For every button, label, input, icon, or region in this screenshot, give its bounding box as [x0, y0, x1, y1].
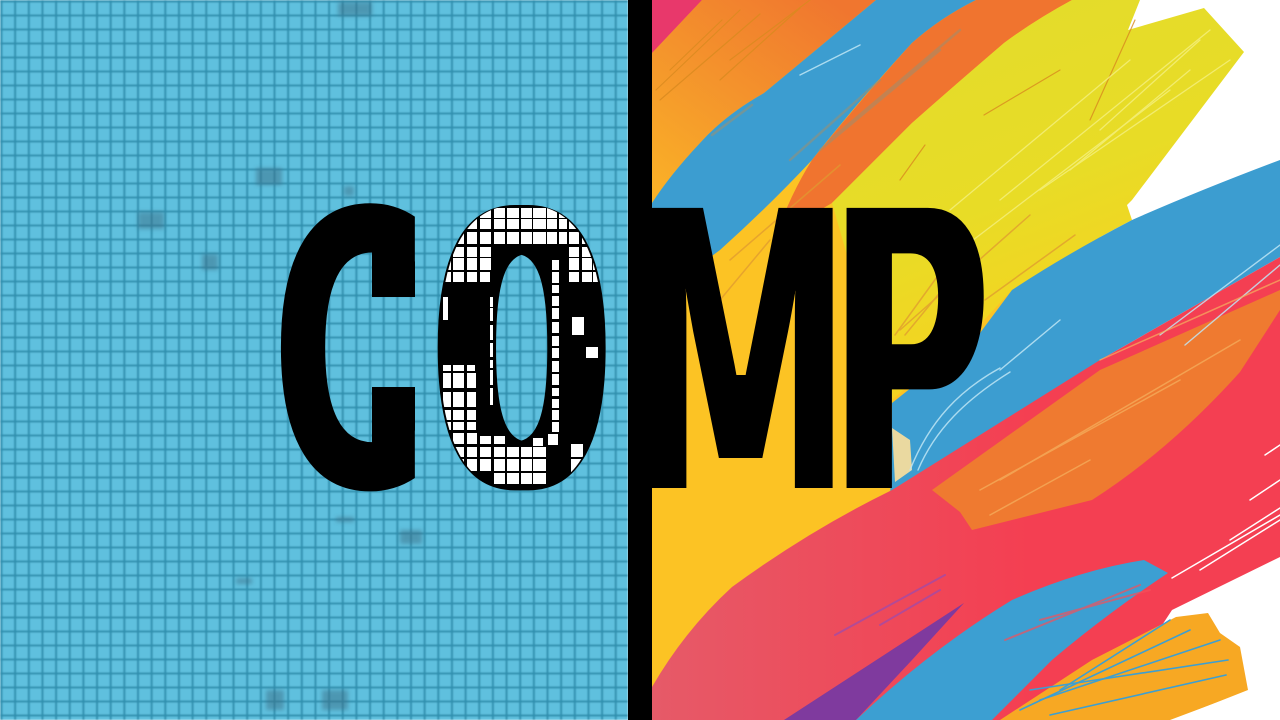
title word: COMP [280, 203, 984, 492]
panel: blue grid background [0, 0, 628, 720]
letter O: O [431, 135, 613, 574]
letter P: P [839, 120, 984, 575]
panel: paint strokes [652, 0, 1280, 720]
icon: white grid cells inside O [443, 208, 600, 484]
letter O [438, 205, 606, 490]
icon: bristle streaks [656, 0, 1280, 715]
divider bar [628, 0, 652, 720]
letter C: C [259, 134, 437, 577]
blue edge line on M [650, 208, 652, 488]
letter M: M [634, 120, 847, 575]
